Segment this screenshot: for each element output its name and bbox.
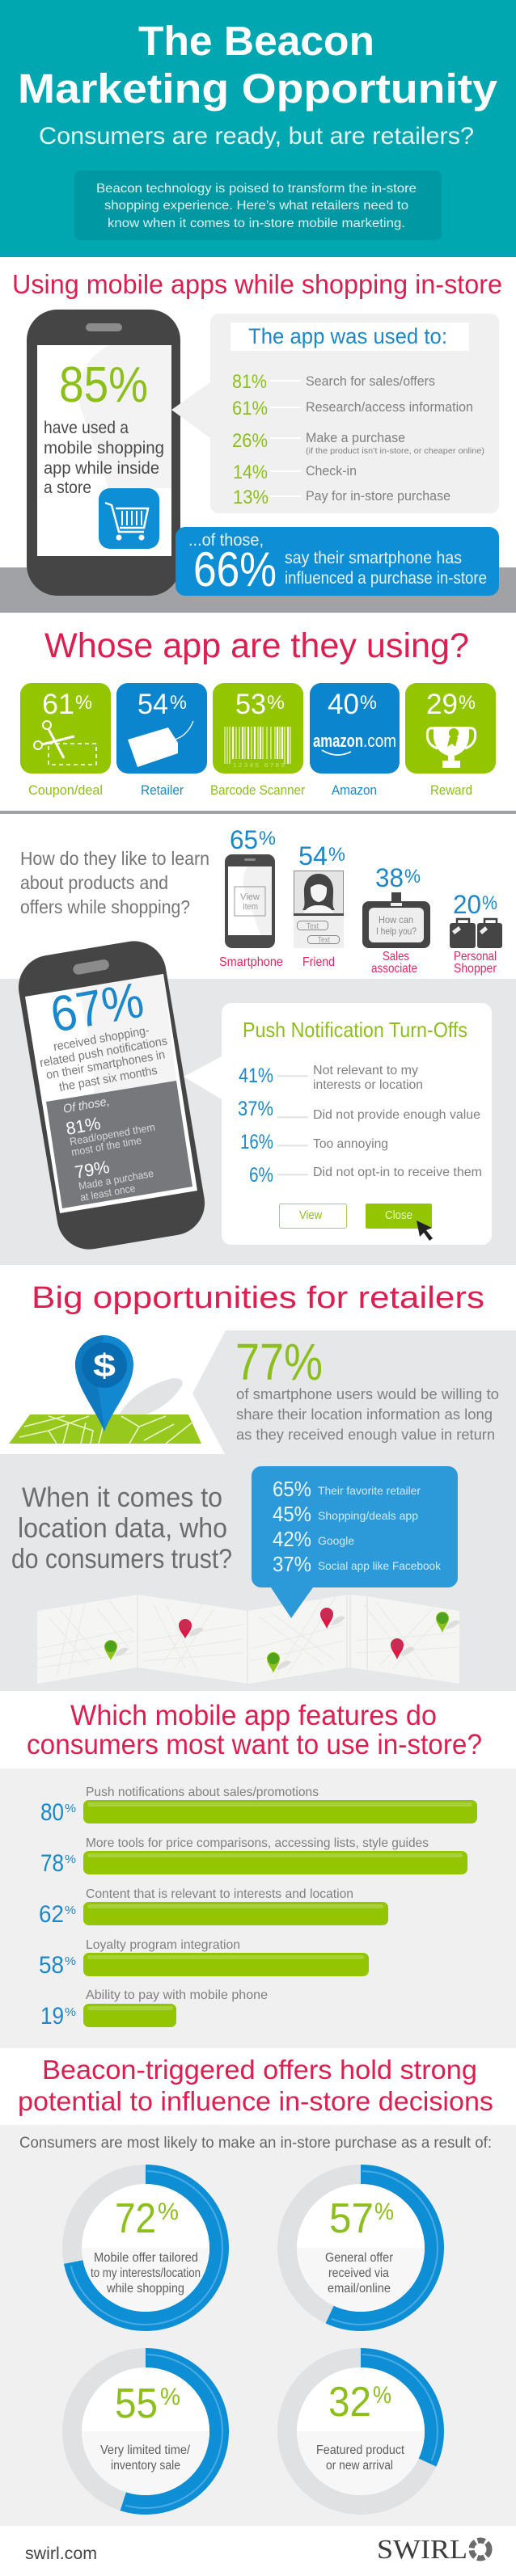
callout: 66%: influenced a purchase in-store (285, 569, 487, 588)
channel: sales associate 38%: Sales (383, 950, 409, 963)
icon: cursor (417, 1221, 433, 1241)
channel: sales associate 38% (362, 863, 430, 976)
row: 26%: 26% (232, 430, 268, 452)
bar: 58%: Loyalty program integration (86, 1938, 240, 1952)
channel: personal shopper 20%: 20 (453, 890, 481, 919)
ring: 32% (282, 2353, 439, 2510)
callout: trust list: 45% (273, 1502, 311, 1526)
panel: push notification turn-offs (184, 1003, 492, 1245)
tile: reward: 29 (426, 689, 458, 720)
ring: 72%: 72 (115, 2195, 156, 2242)
bar chart: app features (0, 1769, 516, 2048)
channel: smartphone 65%: Item (243, 902, 258, 912)
tilted phone: 67%: Of those, (62, 1094, 111, 1116)
tile: reward: Reward (430, 782, 472, 798)
icon: barcode: 1 2 3 4 5 6 7 8 9 (233, 763, 285, 769)
question: how do they like to learn: How do they like to learn (20, 848, 209, 869)
icon: scissors (34, 721, 96, 765)
ring: 57%: received via (328, 2266, 389, 2280)
bar: 19% (40, 1988, 268, 2030)
tile: coupon: % (75, 692, 92, 714)
intro box: know when it comes to in-store mobile marketing. (108, 217, 405, 230)
row: 26% (232, 430, 484, 456)
channel: personal shopper 20%: Personal (454, 950, 497, 963)
question: who do consumers trust (11, 1482, 232, 1575)
callout: trust list (252, 1466, 458, 1618)
row: 37%: 37% (238, 1098, 273, 1120)
tilted phone: 67%: 67% (46, 972, 148, 1043)
row: 14%: Check-in (306, 463, 357, 479)
icon: price tag (128, 721, 193, 767)
ring: 57%: General offer (325, 2251, 393, 2265)
heading: beacon-triggered offers (0, 2048, 516, 2125)
row: 61% (232, 398, 473, 419)
ring: 72%: to my interests/location (91, 2266, 201, 2280)
tilted phone: 67%: Made a purchase (78, 1167, 154, 1192)
ring: 32%: Featured product (316, 2443, 405, 2457)
ring: 57%: % (374, 2199, 394, 2225)
channel: smartphone 65%: Smartphone (219, 955, 283, 969)
heading: whose app: Whose app are they using? (44, 626, 469, 665)
bar: 62%: 62 (39, 1901, 64, 1928)
ring: 72%: while shopping (106, 2282, 184, 2296)
bar: 58%: 58 (39, 1952, 64, 1979)
bar: 80% (40, 1785, 477, 1826)
intro box: shopping experience. Here’s what retailers need to (104, 199, 408, 213)
title (18, 18, 498, 112)
panel: push notifications (0, 936, 516, 1265)
ring: 32%: or new arrival (326, 2459, 393, 2473)
callout: 66%: ...of those, (188, 531, 264, 550)
title: The Beacon (138, 18, 374, 64)
tile: reward: % (459, 692, 476, 714)
ring: 55%: % (160, 2384, 180, 2410)
button: close: Close (385, 1208, 412, 1222)
row: 26%: Make a purchase (306, 430, 405, 445)
question: who do consumers trust: do consumers trust? (11, 1544, 232, 1575)
map pins (104, 1608, 460, 1673)
heading: which mobile app features: consumers most want to use in-store? (27, 1729, 482, 1760)
ring: 55% (67, 2353, 224, 2510)
channel: friend 54%: Text (318, 936, 330, 945)
stat: 77%: of smartphone users would be willing to (236, 1386, 499, 1402)
callout: trust list: 42% (273, 1527, 311, 1551)
row: 81%: 81% (232, 371, 267, 393)
ring: 55%: Very limited time/ (100, 2443, 191, 2457)
bar: 78%: % (65, 1853, 76, 1866)
bar: 80%: 80 (40, 1799, 64, 1826)
callout: trust list: Shopping/deals app (318, 1509, 418, 1522)
tiles: whose app (20, 683, 496, 798)
row: 14%: 14% (233, 462, 268, 483)
bar: 78%: 78 (40, 1850, 64, 1877)
icon: amazon logo: amazon (313, 731, 363, 751)
panel: the app was used to: The app was used to: (248, 324, 447, 348)
bar: 62% (39, 1887, 388, 1928)
tile: amazon: % (360, 692, 377, 714)
tile: amazon (310, 683, 400, 798)
bar: 19%: 19 (40, 2003, 64, 2030)
bar: 80%: % (65, 1802, 76, 1815)
channel: sales associate 38%: associate (371, 962, 417, 976)
icon: map with dollar pin (9, 1335, 201, 1444)
tilted phone: 67% (14, 936, 209, 1254)
tile: coupon: Coupon/deal (28, 782, 103, 798)
panel: the app was used to (171, 314, 499, 513)
channel: sales associate 38%: 38 (375, 863, 404, 892)
tile: barcode: Barcode Scanner (210, 782, 305, 798)
header panel (0, 0, 516, 257)
icon: amazon logo: .com (363, 731, 396, 751)
phone: 85%: 85% (59, 357, 148, 413)
tile: coupon (20, 683, 111, 798)
heading: beacon-triggered offers: potential to influence in-store decisions (18, 2086, 493, 2116)
row: 16%: Too annoying (313, 1137, 388, 1151)
question: who do consumers trust: location data, who (18, 1513, 227, 1544)
website: swirl.com (25, 2544, 97, 2563)
channel: sales associate 38%: % (404, 866, 421, 887)
bar: 78%: More tools for price comparisons, accessing lists, style guides (86, 1836, 429, 1850)
callout: trust list: Their favorite retailer (318, 1484, 421, 1497)
tilted phone: 67%: at least once (79, 1182, 136, 1204)
channel: smartphone 65%: View (240, 892, 260, 902)
tilted phone: 67%: 79% (74, 1157, 111, 1183)
ring: 55%: inventory sale (111, 2459, 180, 2473)
callout: trust list: Google (318, 1534, 354, 1547)
row: 16%: 16% (240, 1131, 273, 1153)
channel: smartphone 65% (219, 825, 283, 969)
bar: 62%: Content that is relevant to interests and location (86, 1887, 353, 1901)
panel: using mobile apps (0, 310, 516, 613)
intro box: Beacon technology is poised to transform the in-store (96, 182, 417, 196)
button: view: View (299, 1208, 322, 1222)
row: 81% (232, 371, 435, 393)
icon: shopping cart (99, 488, 159, 549)
row: 26%: (if the product isn’t in-store, or cheaper online) (306, 446, 484, 456)
title: Marketing Opportunity (18, 65, 498, 112)
question: who do consumers trust: When it comes to (22, 1482, 222, 1513)
folded map (37, 1595, 460, 1684)
callout: 66%: say their smartphone has (285, 549, 462, 567)
tilted phone: 67%: received shopping- (53, 1023, 150, 1054)
button: view (280, 1204, 346, 1229)
row: 61%: Research/access information (306, 399, 473, 415)
phone: 85%: mobile shopping (44, 439, 164, 457)
row: 13% (233, 487, 450, 508)
bar: 62%: % (65, 1904, 76, 1917)
row: 41%: interests or location (313, 1078, 423, 1092)
tilted phone: 67%: related push notifications (39, 1034, 168, 1070)
bar: 19%: % (65, 2005, 76, 2019)
callout: 66% (176, 527, 499, 597)
channel: friend 54%: % (328, 844, 345, 866)
stat: 77%: as they received enough value in return (236, 1427, 495, 1443)
ring: 32%: % (373, 2382, 391, 2409)
phone: 85%: app while inside (44, 459, 159, 478)
row: 41% (239, 1064, 423, 1092)
ring: 32%: 32 (328, 2379, 371, 2426)
icon: trophy (427, 727, 476, 768)
tile: reward (405, 683, 496, 798)
bar: 80%: Push notifications about sales/promotions (86, 1785, 319, 1799)
row: 61%: 61% (232, 398, 268, 419)
tile: coupon: 61 (42, 689, 74, 720)
phone: 85% (27, 310, 180, 596)
channel: smartphone 65%: 65 (230, 825, 258, 854)
logo: swirl: SWIRL (377, 2535, 467, 2565)
question: how do they like to learn: about products and (20, 872, 168, 893)
ring: 72%: % (158, 2199, 179, 2225)
bar: 78% (40, 1836, 467, 1877)
channel: personal shopper 20%: Shopper (454, 962, 497, 976)
subtitle: Consumers are ready, but are retailers? (39, 123, 474, 150)
callout: trust list: Social app like Facebook (318, 1559, 442, 1572)
bar: 58% (39, 1938, 369, 1979)
tilted phone: 67%: Read/opened them (69, 1121, 156, 1148)
row: 13%: Pay for in-store purchase (306, 488, 450, 504)
row: 13%: 13% (233, 487, 269, 508)
ring: 55%: 55 (115, 2380, 158, 2427)
heading: which mobile app features: Which mobile app features do (70, 1700, 437, 1731)
bar: 19%: Ability to pay with mobile phone (86, 1988, 268, 2002)
ring: 57% (282, 2169, 439, 2326)
stat: 77%: 77% (235, 1333, 323, 1391)
icon: map with dollar pin: $ (93, 1348, 116, 1384)
tile: barcode (210, 683, 305, 798)
row: 6% (249, 1164, 482, 1187)
channel: friend 54%: Friend (302, 955, 335, 969)
tile: retailer: 54 (137, 689, 168, 720)
callout: trust list: 37% (273, 1552, 311, 1576)
tile: barcode: 53 (235, 689, 266, 720)
tilted phone: 67%: the past six months (58, 1064, 159, 1094)
channel: sales associate 38%: I help you? (376, 925, 417, 937)
intro box (74, 171, 442, 240)
ring: 57%: email/online (328, 2282, 391, 2296)
callout: 66%: 66% (193, 542, 277, 597)
ring: 72%: Mobile offer tailored (94, 2251, 198, 2265)
channel: friend 54% (294, 841, 345, 969)
row: 16% (240, 1131, 388, 1153)
icon: barcode (225, 727, 290, 769)
channel: friend 54%: 54 (298, 841, 328, 871)
tilted phone: 67%: most of the time (70, 1134, 142, 1158)
tile: retailer: % (170, 692, 187, 714)
tile: amazon: 40 (328, 689, 359, 720)
row: 6%: 6% (249, 1164, 273, 1187)
tilted phone: 67%: 81% (65, 1113, 102, 1139)
icon: amazon logo (313, 731, 396, 755)
panel: location opportunity (0, 1330, 516, 1691)
row: 6%: Did not opt-in to receive them (313, 1166, 482, 1179)
tilted phone: 67%: on their smartphones in (45, 1048, 166, 1082)
row: 41%: 41% (239, 1065, 273, 1087)
button: close (366, 1204, 432, 1229)
bar: 58%: % (65, 1954, 76, 1968)
heading: big opportunities: Big opportunities for retailers (32, 1281, 484, 1315)
panel: push notification turn-offs: Push Notification Turn-Offs (243, 1018, 467, 1042)
channel: friend 54%: Text (307, 922, 319, 931)
row: 14% (233, 462, 357, 483)
tile: retailer: Retailer (141, 782, 184, 798)
panel: purchase influence rings (0, 2125, 516, 2526)
stat: 77% (235, 1333, 499, 1443)
callout: trust list: 65% (273, 1477, 311, 1501)
row: 37%: Did not provide enough value (313, 1108, 480, 1122)
channel: personal shopper 20% (450, 890, 502, 976)
stat: 77%: share their location information as long (236, 1406, 493, 1423)
channel: smartphone 65%: % (259, 828, 276, 850)
channel: sales associate 38%: How can (379, 914, 413, 925)
ring: 72% (67, 2169, 224, 2326)
row: 81%: Search for sales/offers (306, 373, 435, 389)
heading: beacon-triggered offers: Beacon-triggered offers hold strong (42, 2055, 477, 2085)
tile: retailer (116, 683, 207, 798)
heading: which mobile app features (27, 1700, 482, 1760)
tile: barcode: % (267, 692, 285, 714)
phone: 85%: a store (44, 479, 91, 497)
question: how do they like to learn (20, 848, 209, 917)
subheading: Consumers are most likely to make an in-store purchase as a result of: (19, 2135, 492, 2152)
footer (25, 2535, 489, 2565)
tile: amazon: Amazon (332, 782, 377, 798)
heading: using mobile apps: Using mobile apps while shopping in-store (12, 269, 502, 299)
channel: personal shopper 20%: % (482, 892, 497, 914)
phone: 85%: have used a (44, 419, 129, 437)
row: 41%: Not relevant to my (313, 1064, 418, 1077)
pictogram chart: learning channels (219, 825, 502, 976)
row: 37% (238, 1098, 480, 1122)
question: how do they like to learn: offers while shopping? (20, 896, 190, 917)
ring: 57%: 57 (329, 2195, 374, 2242)
